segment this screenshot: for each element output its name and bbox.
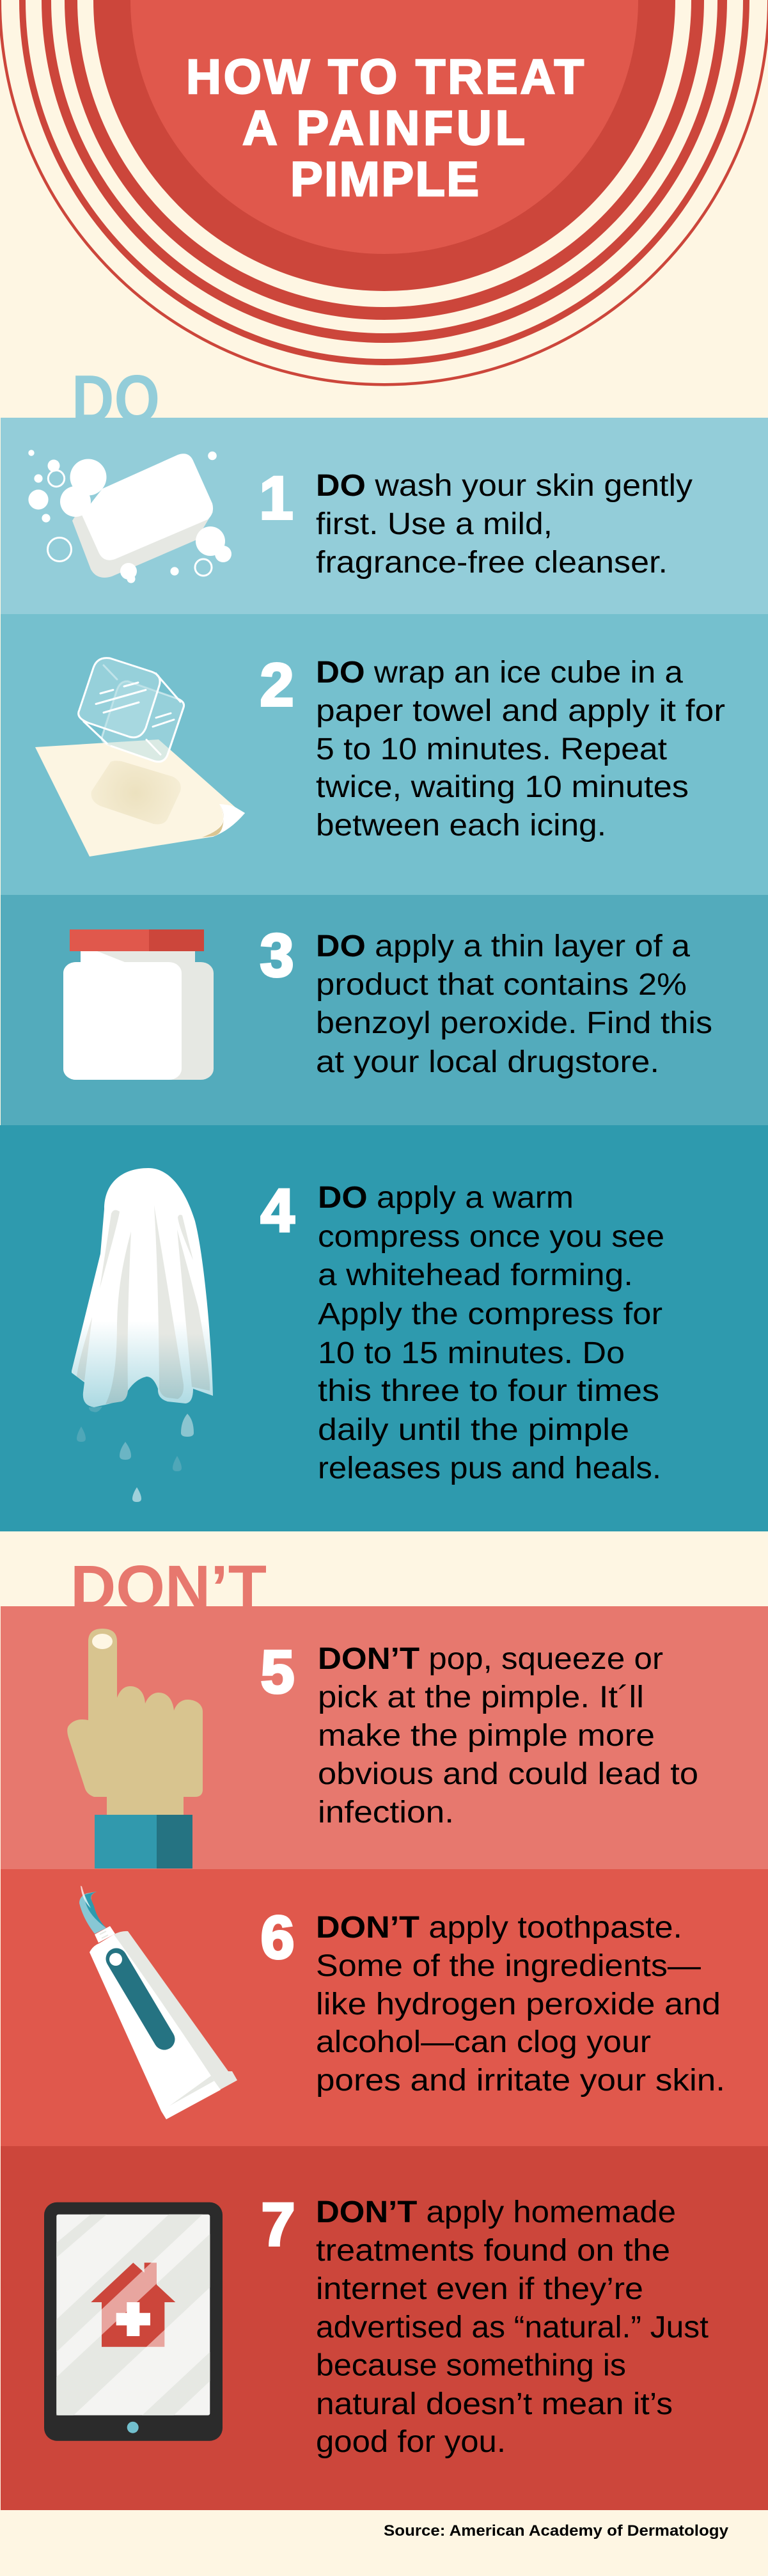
step 4 text: [318, 1181, 664, 1485]
number 2: 2: [260, 651, 294, 719]
icon: pointing finger hand: [67, 1629, 203, 1869]
step 4 text: a whitehead forming.: [318, 1258, 633, 1292]
number 1: 1: [260, 464, 293, 532]
step 3 text: DO apply a thin layer of a: [316, 929, 690, 963]
step 7 text: good for you.: [316, 2425, 506, 2459]
step 5 text: pick at the pimple. It´ll: [318, 1680, 644, 1714]
step 5 text: make the pimple more: [318, 1719, 655, 1753]
step 3 text: product that contains 2%: [316, 968, 687, 1002]
step 2 text: twice, waiting 10 minutes: [316, 770, 689, 804]
step 6 text: Some of the ingredients—: [316, 1949, 701, 1983]
panel: step 5 pop: [1, 1606, 768, 1869]
step 1 text: [316, 469, 693, 580]
step 7 text: internet even if they’re: [316, 2272, 643, 2306]
icon: product jar: [63, 929, 214, 1080]
icon: soap bar: [28, 450, 231, 583]
icon: toothpaste tube: [79, 1886, 237, 2119]
step 2 text: DO wrap an ice cube in a: [316, 656, 683, 690]
step 7 text: because something is: [316, 2349, 626, 2382]
panel: step 1 wash: [1, 418, 768, 614]
step 6 text: DON’T apply toothpaste.: [316, 1911, 682, 1945]
icon: warm compress cloth with drops: [72, 1168, 213, 1502]
step 5 text: DON’T pop, squeeze or: [318, 1642, 663, 1676]
number 7: 7: [262, 2191, 295, 2259]
step 4 text: Apply the compress for: [318, 1297, 662, 1331]
step 1 text: first. Use a mild,: [316, 507, 552, 541]
step 6 text: [316, 1911, 725, 2098]
source credit: Source: American Academy of Dermatology: [384, 2522, 729, 2540]
icon: ice cube on paper towel: [35, 658, 245, 857]
heading: DO: DO: [72, 361, 160, 437]
title: [186, 50, 584, 207]
step 3 text: [316, 929, 712, 1079]
panel: step 3 jar: [1, 895, 768, 1125]
step 4 text: compress once you see: [318, 1220, 664, 1254]
step 2 text: 5 to 10 minutes. Repeat: [316, 732, 667, 766]
step 6 text: like hydrogen peroxide and: [316, 1987, 721, 2021]
title: A PAINFUL: [242, 101, 525, 155]
step 4 text: daily until the pimple: [318, 1413, 629, 1447]
icon: tablet with house: [44, 2202, 223, 2441]
step 7 text: natural doesn’t mean it’s: [316, 2387, 673, 2421]
number 4: 4: [261, 1177, 295, 1245]
step 7 text: advertised as “natural.” Just: [316, 2311, 709, 2344]
step 4 text: 10 to 15 minutes. Do: [318, 1336, 625, 1370]
step 1 text: DO wash your skin gently: [316, 469, 693, 503]
step 5 text: [318, 1642, 698, 1829]
step 5 text: obvious and could lead to: [318, 1757, 698, 1791]
number 3: 3: [260, 922, 294, 990]
step 7 text: treatments found on the: [316, 2234, 670, 2268]
panel: step 2 ice: [1, 614, 768, 895]
step 6 text: alcohol—can clog your: [316, 2025, 651, 2059]
title: HOW TO TREAT: [186, 50, 584, 104]
step 3 text: at your local drugstore.: [316, 1045, 659, 1079]
step 3 text: benzoyl peroxide. Find this: [316, 1006, 712, 1040]
step 7 text: [316, 2195, 709, 2459]
step 4 text: this three to four times: [318, 1374, 659, 1408]
panel: step 7 homemade: [1, 2146, 768, 2510]
step 6 text: pores and irritate your skin.: [316, 2064, 725, 2098]
step 5 text: infection.: [318, 1796, 454, 1829]
number 6: 6: [261, 1904, 294, 1972]
title: PIMPLE: [290, 152, 479, 207]
step 1 text: fragrance-free cleanser.: [316, 546, 668, 580]
step 2 text: paper towel and apply it for: [316, 694, 725, 728]
step 2 text: between each icing.: [316, 809, 606, 842]
number 5: 5: [261, 1638, 294, 1706]
panel: step 4 compress: [0, 1125, 768, 1531]
heading: DON'T: DON’T: [70, 1553, 267, 1622]
step 4 text: DO apply a warm: [318, 1181, 574, 1215]
panel: step 6 toothpaste: [1, 1869, 768, 2146]
step 2 text: [316, 656, 725, 842]
header concentric circles: [0, 0, 768, 386]
step 4 text: releases pus and heals.: [318, 1451, 661, 1485]
step 7 text: DON’T apply homemade: [316, 2195, 676, 2229]
